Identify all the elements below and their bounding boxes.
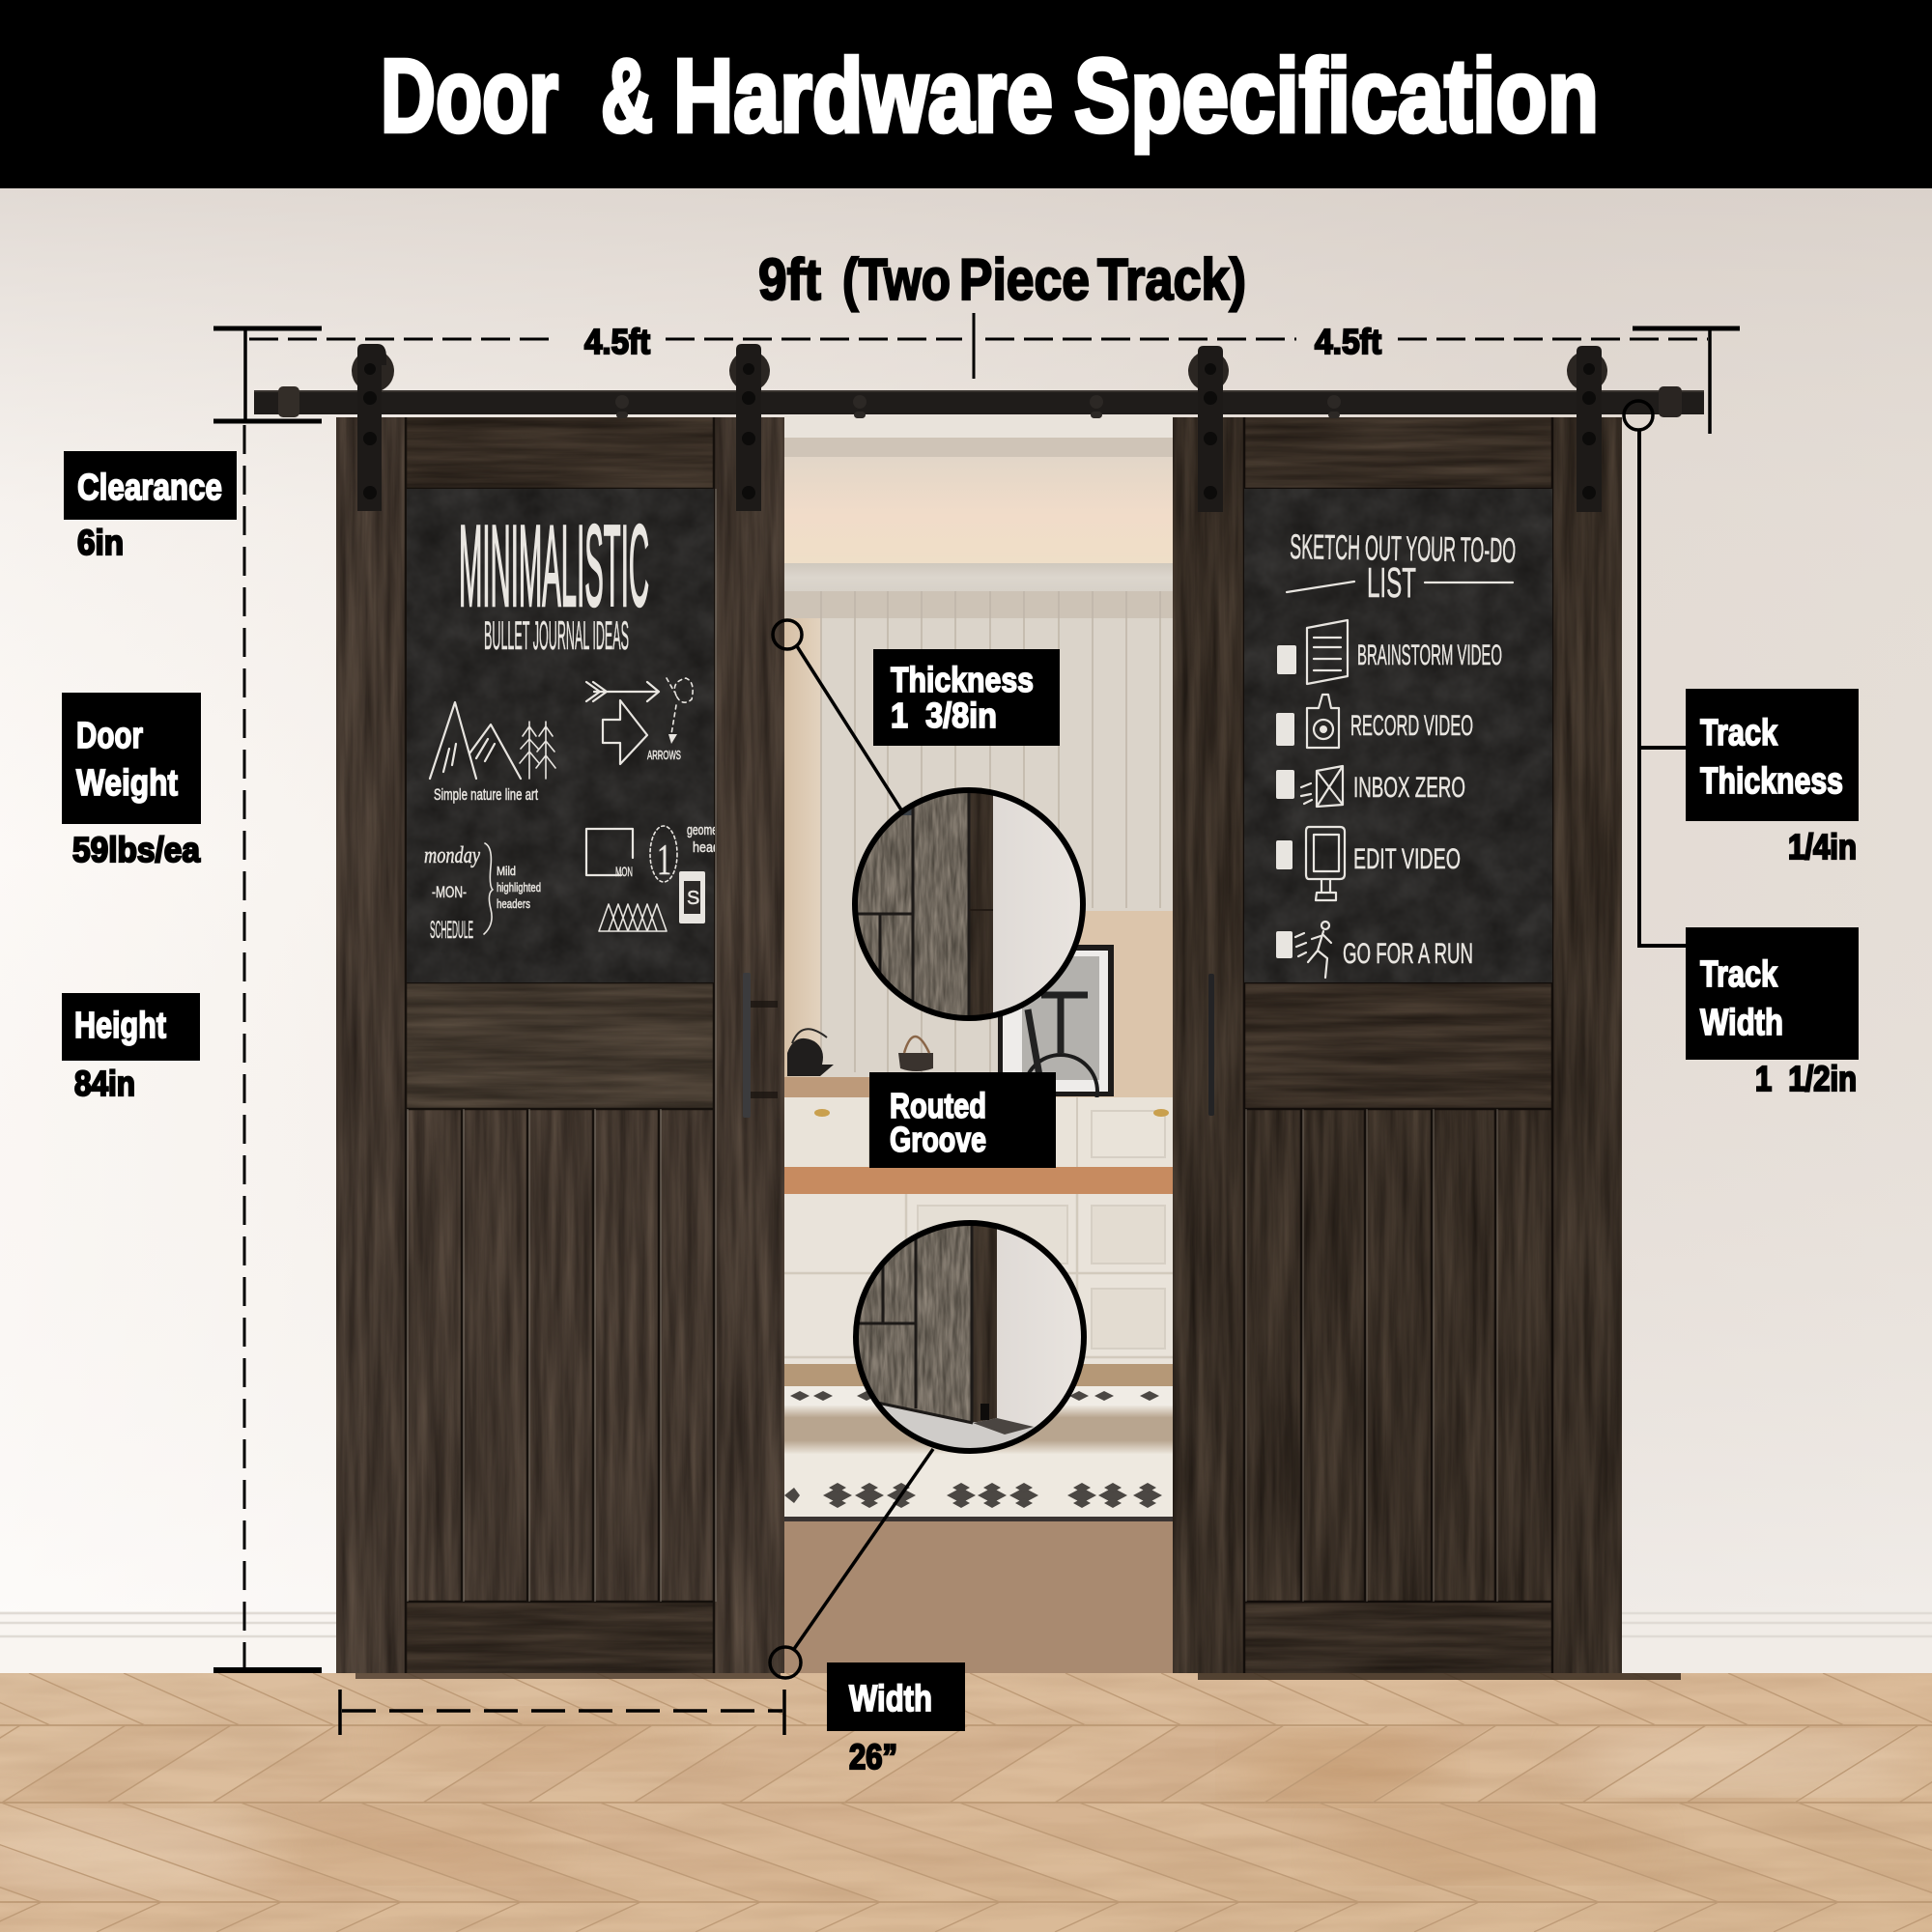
picture frame with bicycle: [998, 945, 1114, 1128]
hanger 3: [1188, 346, 1229, 512]
track width callout: [1686, 927, 1859, 1098]
chalk list label: [1287, 559, 1513, 607]
infographic canvas: MINIMALISTIC: [459, 501, 649, 631]
right door chalkboard: BRAINSTORM VIDEO: [1357, 639, 1502, 671]
brass knobs: [814, 1109, 1169, 1287]
title: Door: [381, 37, 558, 154]
thickness callout: [873, 649, 1060, 746]
track width callout: Width: [1700, 1003, 1783, 1043]
width callout: [827, 1662, 965, 1776]
title: Specification: [1074, 37, 1599, 154]
chalk geometric headers: S: [687, 888, 699, 909]
clearance callout: [64, 451, 237, 562]
door weight callout: Door: [76, 716, 143, 756]
title: Hardware: [673, 37, 1053, 154]
right door: [1173, 417, 1622, 1673]
title: &: [601, 37, 653, 154]
clearance callout: Clearance: [77, 468, 222, 508]
chalk monday schedule: [424, 843, 541, 944]
track width callout: Track: [1700, 954, 1778, 995]
chalk row: go for a run: GO FOR A RUN: [1343, 938, 1473, 970]
chalk geometric headers: geome: [687, 822, 718, 838]
track thickness callout: Thickness: [1700, 761, 1843, 802]
routed groove callout: [869, 1072, 1056, 1168]
chalk row: inbox zero: INBOX ZERO: [1353, 772, 1465, 804]
track length label: Track): [1097, 247, 1246, 312]
chalk row: edit video: [1276, 827, 1461, 900]
right door chalkboard: [1244, 489, 1552, 982]
chalk monday schedule: highlighted: [497, 880, 541, 895]
chalk arrows: [586, 678, 693, 764]
chalk row: record video: [1276, 695, 1473, 748]
chalk monday schedule: headers: [497, 896, 530, 911]
chalk row: inbox zero: [1276, 766, 1465, 807]
left door: [336, 417, 784, 1673]
width leader: [770, 1449, 933, 1678]
track dimension lines: [213, 313, 1740, 434]
track leader lines: [1624, 401, 1686, 946]
chalk geometric headers: MON: [615, 864, 633, 879]
chalk monday schedule: monday: [424, 843, 480, 868]
barn door track: [254, 386, 1704, 418]
half track label left: 4.5ft: [584, 322, 650, 361]
thickness leader: [773, 620, 902, 811]
floor: chevron parquet: [0, 1673, 1932, 1932]
half track label right: 4.5ft: [1315, 322, 1381, 361]
door floor shadows: [355, 1673, 781, 1679]
chalk geometric headers: [586, 822, 720, 931]
chalk geometric headers: 1: [657, 835, 671, 884]
right door chalkboard: SKETCH OUT YOUR TO-DO: [1290, 526, 1517, 570]
door weight value: 59lbs/ea: [72, 830, 201, 869]
routed groove callout: Groove: [890, 1120, 986, 1159]
chalk monday schedule: SCHEDULE: [430, 917, 473, 944]
height callout: [62, 993, 200, 1103]
track length label: Piece: [959, 247, 1090, 312]
door height dimension line: [213, 425, 322, 1670]
hanger 4: [1567, 346, 1607, 512]
hanger straps and wheels: [352, 344, 1607, 512]
chalk arrows: ARROWS: [647, 748, 681, 762]
height callout: Height: [74, 1006, 166, 1046]
kitchen view through the opening: [784, 415, 1173, 1673]
door width dimension line: [340, 1690, 784, 1735]
chalk list label: LIST: [1367, 559, 1416, 607]
door weight callout: [62, 693, 201, 869]
track thickness callout: Track: [1700, 713, 1778, 753]
chalk monday schedule: -MON-: [432, 883, 467, 901]
chalk row: go for a run: [1276, 922, 1473, 978]
track thickness callout: [1686, 689, 1859, 867]
track stops: [278, 386, 299, 417]
track length label: 9ft: [758, 247, 821, 312]
routed groove callout: Routed: [890, 1086, 986, 1125]
rug motif: [784, 1391, 1162, 1508]
hanger 1: [352, 344, 394, 511]
header band: [0, 0, 1932, 188]
left door handle: [743, 973, 778, 1118]
chalk row: record video: RECORD VIDEO: [1350, 710, 1473, 742]
left door: BULLET JOURNAL IDEAS: [484, 612, 629, 658]
track length label: (Two: [842, 247, 951, 312]
teapots: [787, 1029, 933, 1076]
chalk geometric headers: head: [693, 839, 720, 856]
height value: 84in: [74, 1064, 135, 1103]
track bolts: [615, 395, 1341, 418]
chalk mountains and trees: Simple nature line art: [434, 785, 538, 804]
hanger 2: [729, 344, 770, 511]
chalk monday schedule: Mild: [497, 864, 516, 878]
chalk row: brainstorm video: [1277, 620, 1502, 684]
track width value: 1 1/2in: [1755, 1059, 1857, 1098]
right door handle: [1208, 974, 1214, 1116]
clearance value: 6in: [77, 523, 124, 562]
track length label: [758, 247, 1246, 312]
track thickness value: 1/4in: [1788, 827, 1857, 867]
thickness callout: Thickness: [891, 660, 1034, 699]
baseboard: [0, 1611, 1932, 1673]
inset: routed groove at door bottom: [850, 1217, 1087, 1454]
width value: 26”: [849, 1737, 897, 1776]
title: [381, 37, 1599, 154]
thickness callout: 1 3/8in: [891, 696, 997, 735]
inset: door edge thickness: [850, 787, 1083, 1024]
chalk row: edit video: EDIT VIDEO: [1353, 843, 1461, 875]
wall background: [0, 188, 1932, 1673]
door weight callout: Weight: [76, 763, 178, 804]
width callout: Width: [849, 1679, 932, 1719]
chalk mountains and trees: [430, 702, 555, 804]
left door chalkboard: [407, 489, 720, 982]
